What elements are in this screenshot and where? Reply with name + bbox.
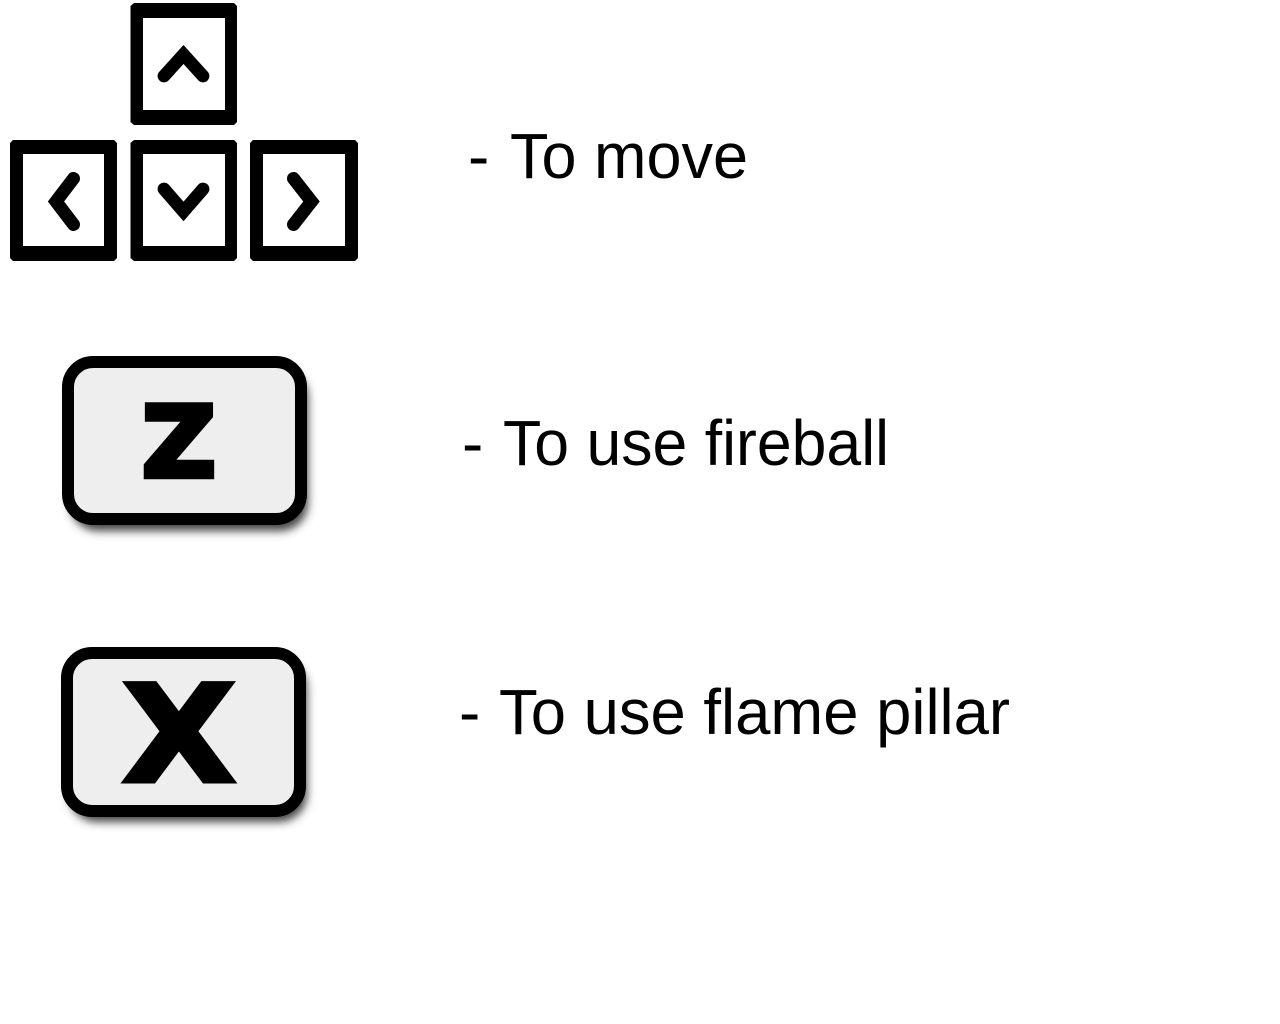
label: to use flame pillar: To use flame pillar	[499, 676, 1010, 748]
label: to use fireball: -	[462, 407, 483, 479]
icon: up key	[130, 3, 237, 125]
icon: right key	[250, 140, 358, 261]
icon: X key	[67, 653, 307, 822]
label: to use flame pillar: -	[459, 676, 480, 748]
icon: arrow keys	[10, 3, 358, 261]
label: to move: To move	[510, 120, 748, 192]
icon: Z key: Z	[142, 385, 216, 500]
icon: left key	[10, 140, 117, 261]
label: to use fireball: To use fireball	[503, 407, 889, 479]
label: to move: -	[468, 120, 489, 192]
icon: X key: X	[122, 657, 236, 814]
icon: Z key	[68, 362, 308, 531]
icon: down key	[130, 140, 237, 261]
